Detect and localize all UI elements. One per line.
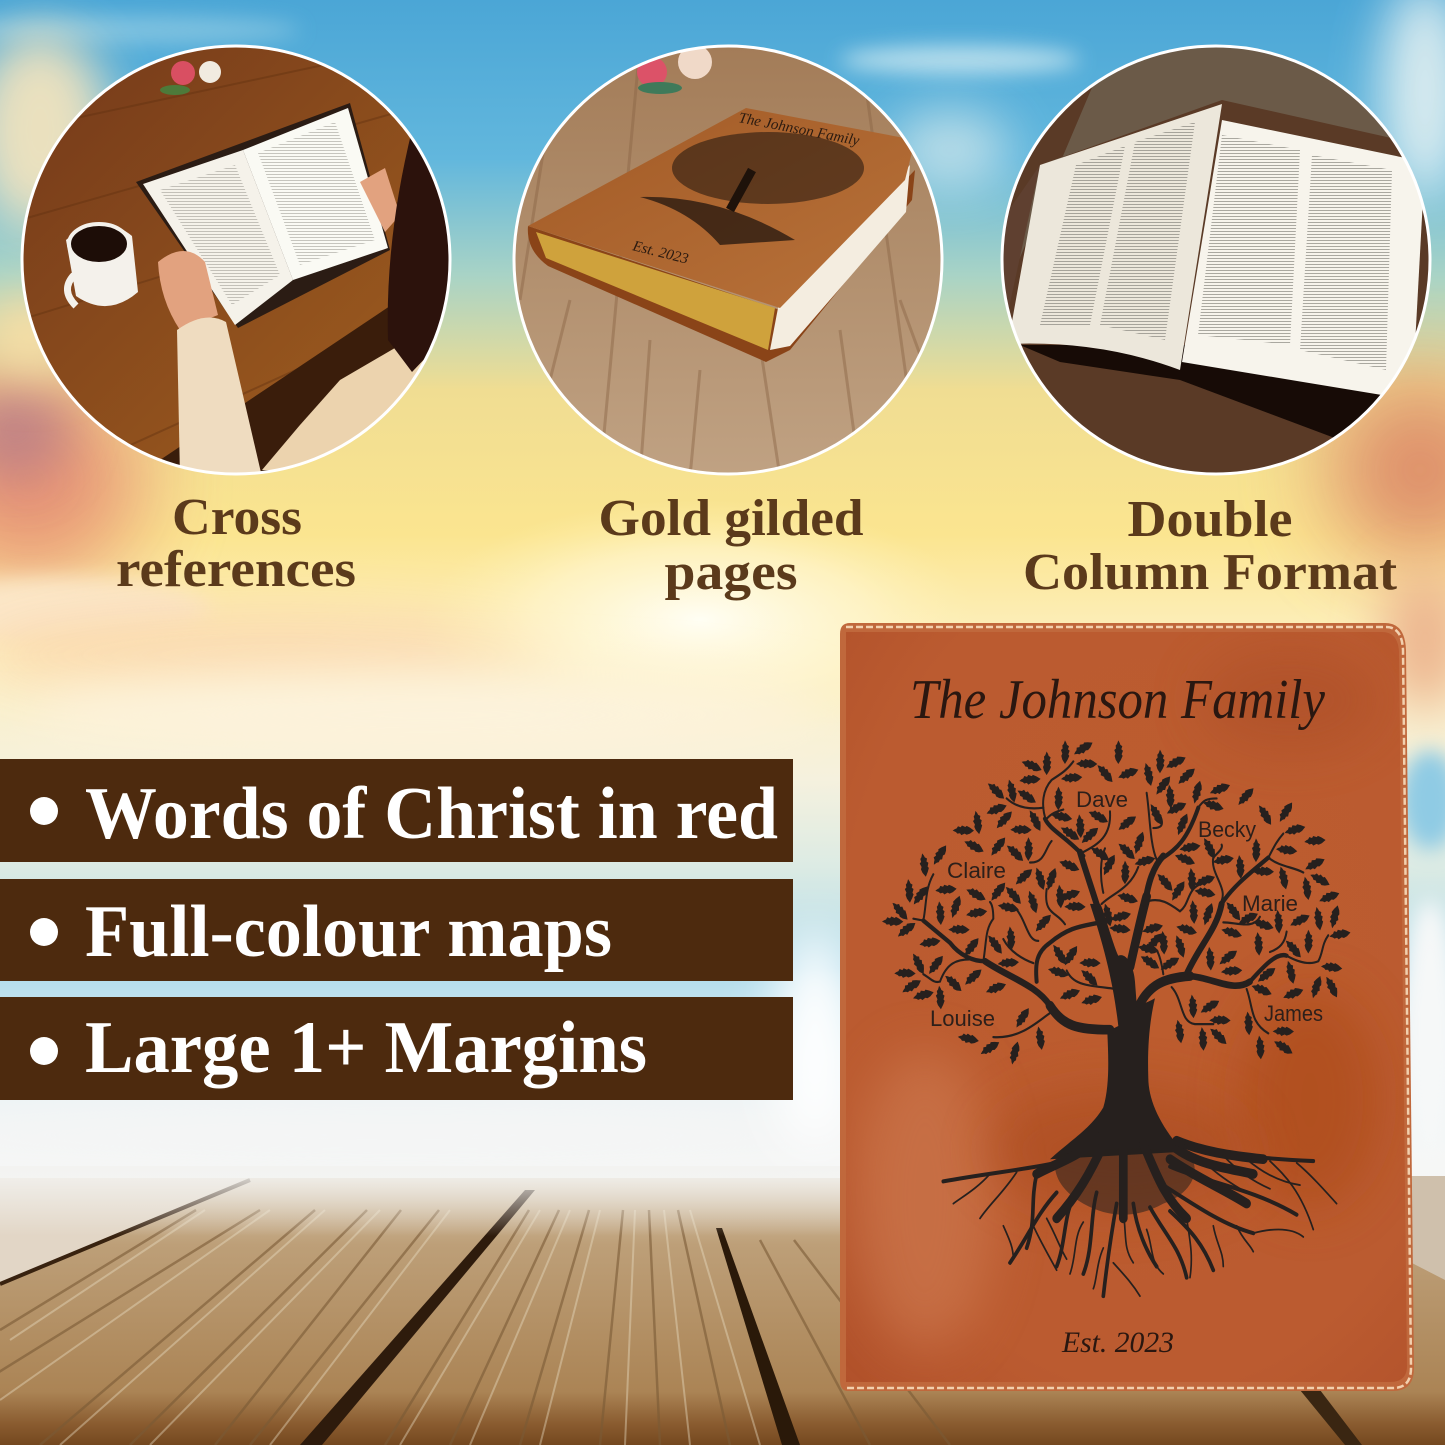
caption: cross references: references: [116, 541, 356, 598]
caption: double column format: [1023, 491, 1398, 601]
family names: Louise: [930, 1006, 995, 1031]
photo circle: open Bible double column: [1002, 45, 1434, 477]
icon: flowers: [160, 61, 221, 95]
hands and sleeve: [158, 168, 400, 477]
caption: gold gilded pages: Gold gilded: [598, 490, 864, 547]
circle border 3: [1002, 46, 1430, 474]
family names: Marie: [1242, 891, 1298, 916]
background: wooden table: [0, 1166, 1445, 1445]
photo circle: reading at a desk: [20, 40, 452, 477]
roots: [943, 1137, 1337, 1296]
feature bar: large margins: [0, 997, 793, 1100]
cover date: Est. 2023: [1061, 1326, 1174, 1359]
cover title: The Johnson Family: [910, 669, 1325, 731]
caption: gold gilded pages: [598, 490, 864, 601]
circle border 2: [514, 46, 942, 474]
feature bar: words of Christ: Words of Christ in red: [85, 773, 778, 855]
leaves: [882, 738, 1351, 1066]
feature bar: large margins: Large 1+ Margins: [85, 1007, 647, 1089]
feature bar: full-colour maps: [0, 879, 793, 981]
hair: [388, 130, 452, 372]
open book: [136, 103, 390, 328]
family names: Claire: [947, 858, 1006, 883]
open book pages: [1008, 104, 1425, 400]
family names: James: [1264, 1001, 1323, 1026]
icon: flowers: [637, 45, 712, 94]
closed book: [528, 108, 915, 362]
branches: [913, 761, 1328, 1037]
trunk: [1050, 904, 1183, 1159]
photo circle: leather Bible with gilded pages: [512, 45, 944, 477]
family names: Dave: [1076, 787, 1128, 812]
circle border 1: [22, 46, 450, 474]
cover tree: [640, 132, 864, 245]
caption: double column format: Column Format: [1023, 544, 1398, 601]
feature bar: full-colour maps: Full-colour maps: [85, 891, 612, 973]
family tree: [882, 738, 1351, 1296]
cover inscription: The Johnson Family: [737, 110, 861, 149]
caption: cross references: Cross: [172, 489, 302, 546]
family names: [930, 787, 1323, 1031]
family names: Becky: [1198, 817, 1256, 842]
mug: [66, 224, 138, 306]
caption: gold gilded pages: pages: [664, 544, 798, 601]
cover date: Est. 2023: [630, 238, 690, 268]
caption: double column format: Double: [1128, 491, 1292, 548]
caption: cross references: [116, 489, 356, 598]
leather Bible cover: [840, 623, 1414, 1391]
